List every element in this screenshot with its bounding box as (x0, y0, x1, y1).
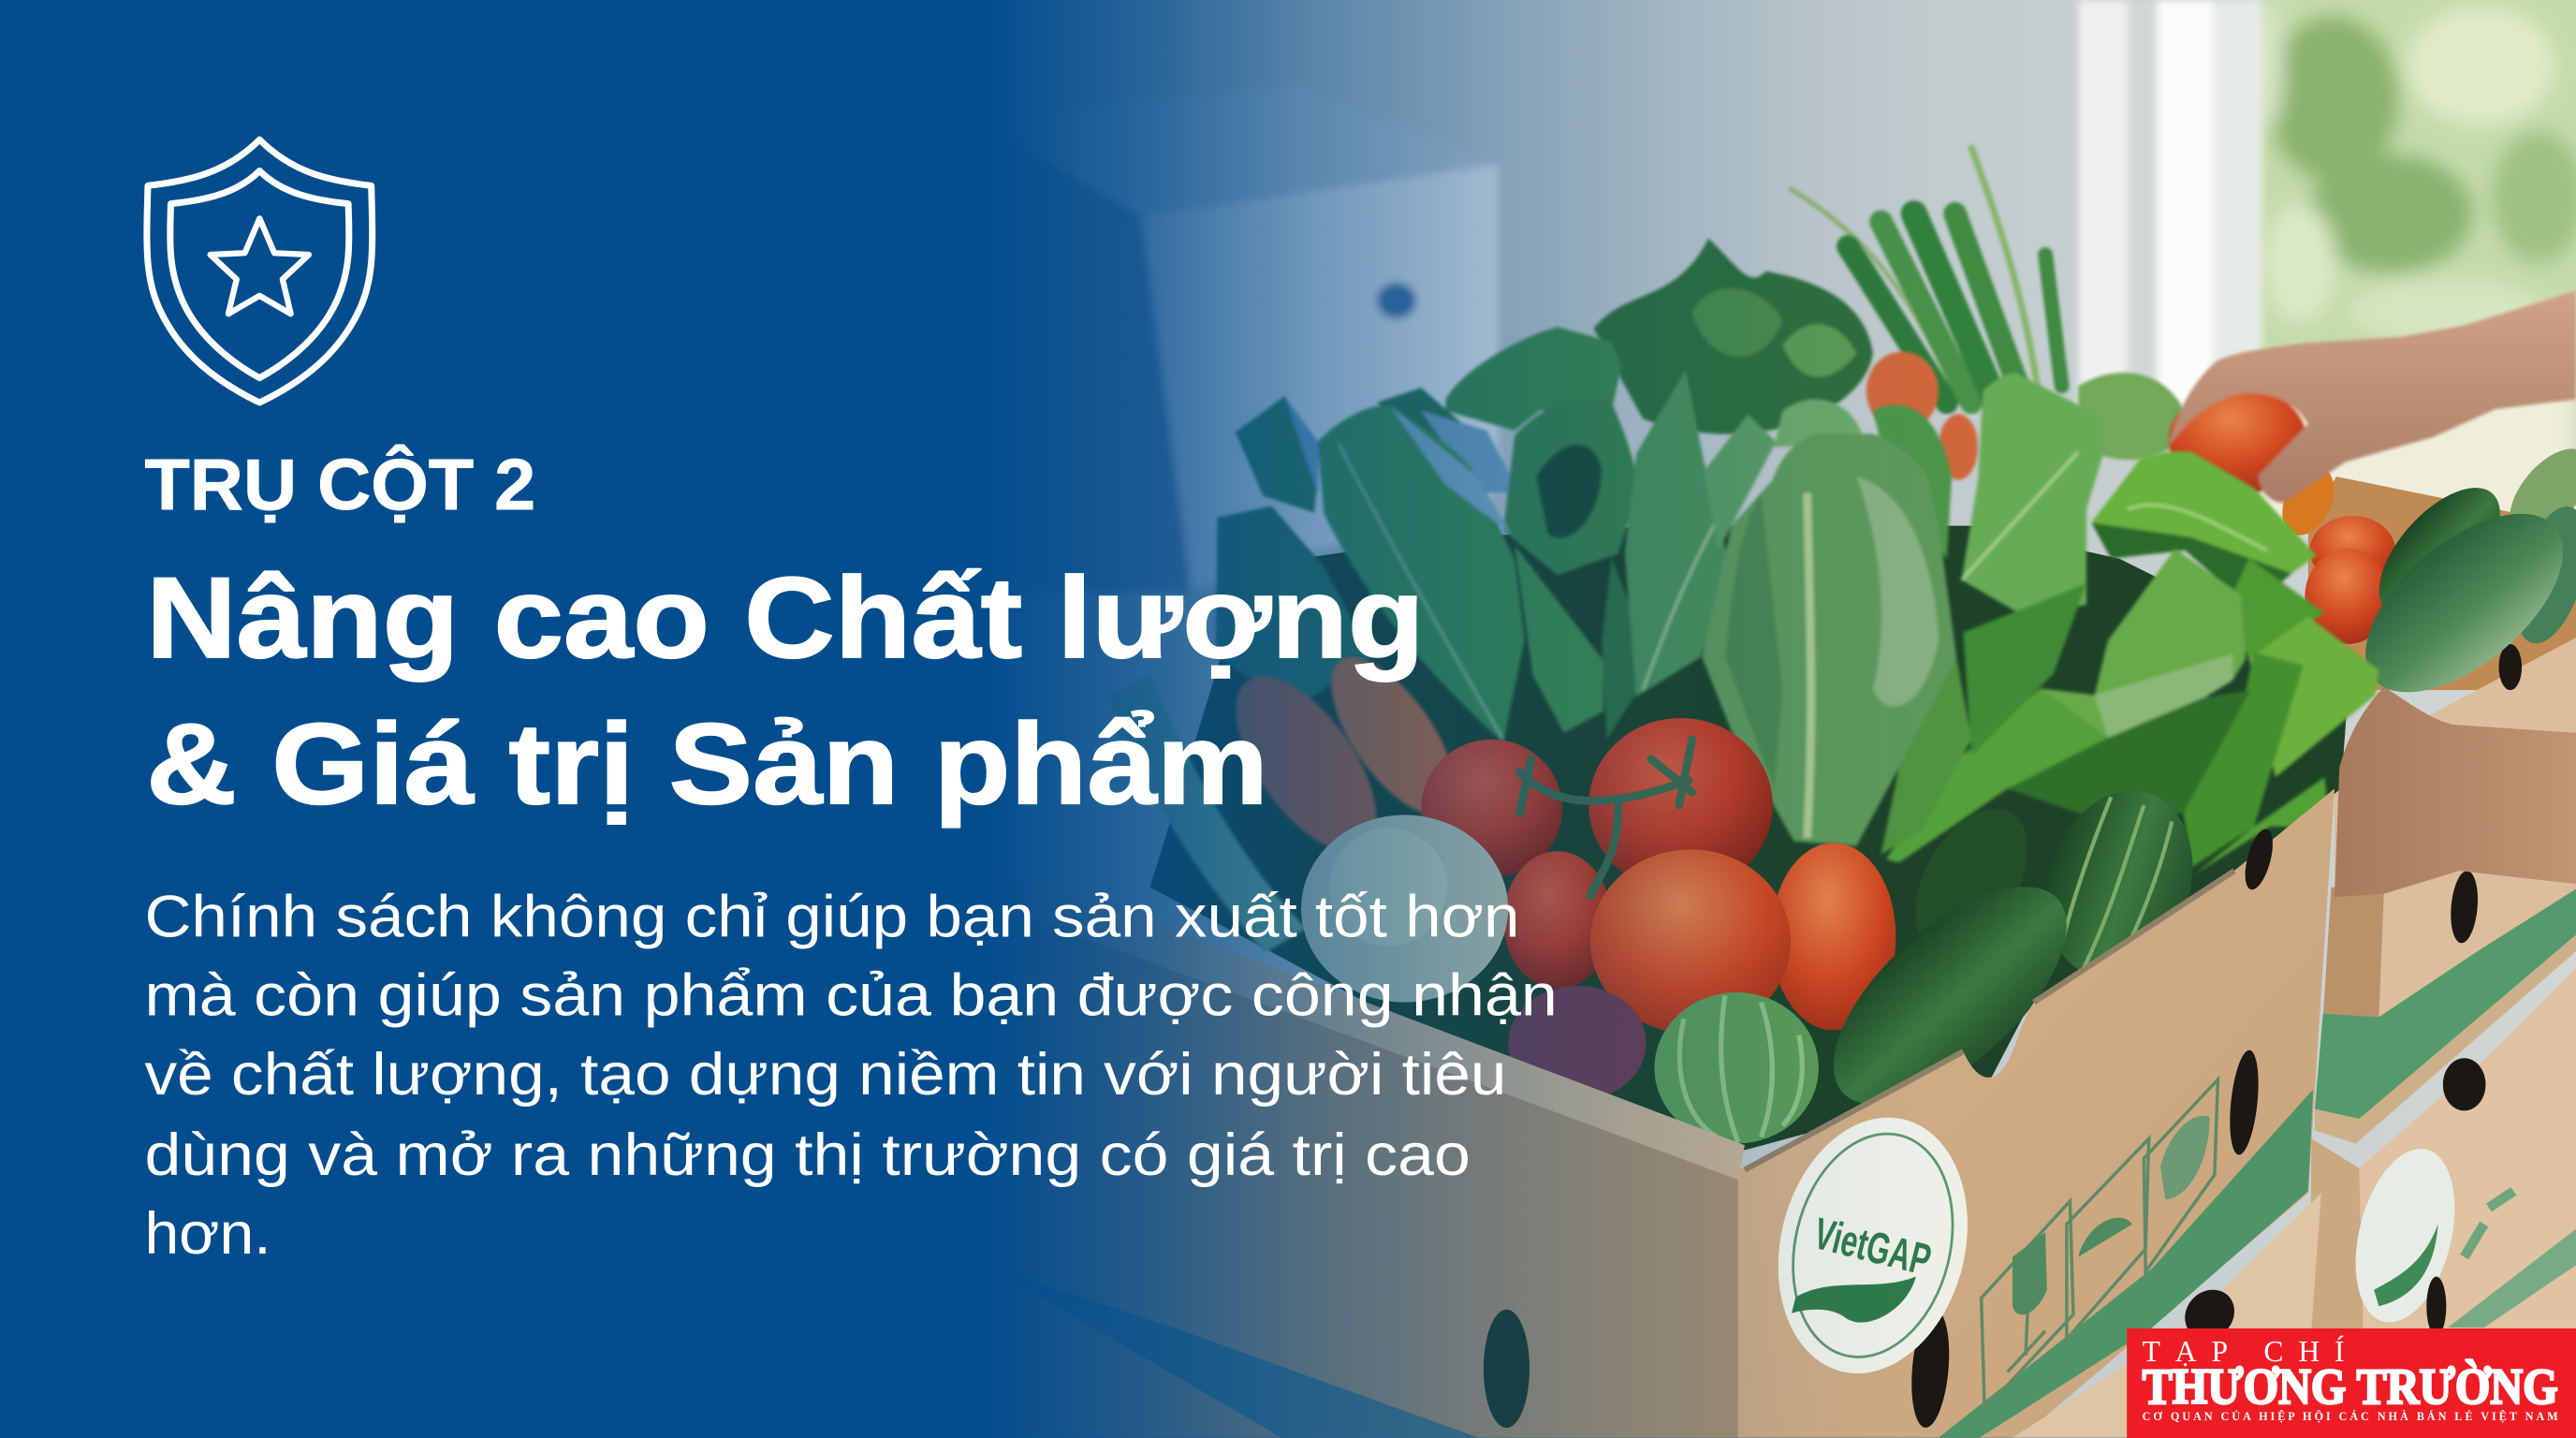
body text: dùng và mở ra những thị trường có giá trị cao (144, 1123, 1471, 1188)
handle holes (2226, 1049, 2262, 1156)
body text: hơn. (144, 1201, 271, 1267)
body text: Chính sách không chỉ giúp bạn sản xuất tốt hơn (144, 884, 1519, 949)
heading (146, 554, 1425, 829)
body text (144, 884, 1558, 1267)
body text: về chất lượng, tạo dựng niềm tin với người tiêu (144, 1042, 1506, 1108)
shadow mass behind the leaves (1150, 526, 2349, 1151)
right stacked boxes (2308, 638, 2576, 1438)
eyebrow: TRỤ CỘT 2: TRỤ CỘT 2 (144, 444, 535, 525)
VietGAP label: VietGAP (1809, 1209, 1936, 1285)
romaine leaf (1702, 433, 1956, 846)
heading: & Giá trị Sản phẩm (146, 700, 1268, 829)
logo: Tạp chí Thương Trường: TẠP CHÍ (2143, 1335, 2345, 1368)
box right face (1738, 788, 2334, 1438)
box below (2012, 1193, 2321, 1438)
white carton behind (970, 85, 1499, 592)
logo: Tạp chí Thương Trường (2127, 1328, 2576, 1438)
far cardboard box (2308, 477, 2576, 690)
VietGAP label (1752, 1097, 1994, 1394)
upper hand holding tomato (2169, 291, 2576, 503)
cucumbers and melon (1654, 771, 2216, 1143)
icon: shield with star (147, 139, 373, 403)
spring onions (1791, 148, 2062, 403)
logo: Tạp chí Thương Trường: CƠ QUAN CỦA HIỆP HỘI CÁC NHÀ BÁN LẺ VIỆT NAM (2143, 1410, 2558, 1423)
heading: Nâng cao Chất lượng (146, 554, 1425, 682)
right bright lettuce leaves (1873, 373, 2378, 874)
herbs behind (1593, 238, 2188, 479)
carrots and leek (1109, 638, 1478, 953)
box left face (970, 862, 1738, 1438)
main cardboard box (970, 788, 2334, 1438)
green band (1939, 1090, 2313, 1438)
carton icons (1982, 1079, 2217, 1410)
dark cabbage leaves (1216, 327, 1865, 742)
pale guava and purple onion (1301, 814, 1647, 1101)
body text: mà còn giúp sản phẩm của bạn được công nhận (144, 963, 1558, 1029)
window with garden view (2078, 0, 2576, 529)
leafy greens (1150, 327, 2378, 1151)
photo: vegetable box scene (822, 0, 2576, 1438)
tomatoes and cucumbers at right (2272, 434, 2576, 726)
tomatoes on the vine (1421, 718, 1895, 1034)
wall background (822, 0, 2576, 1438)
lower arm (2334, 687, 2576, 897)
